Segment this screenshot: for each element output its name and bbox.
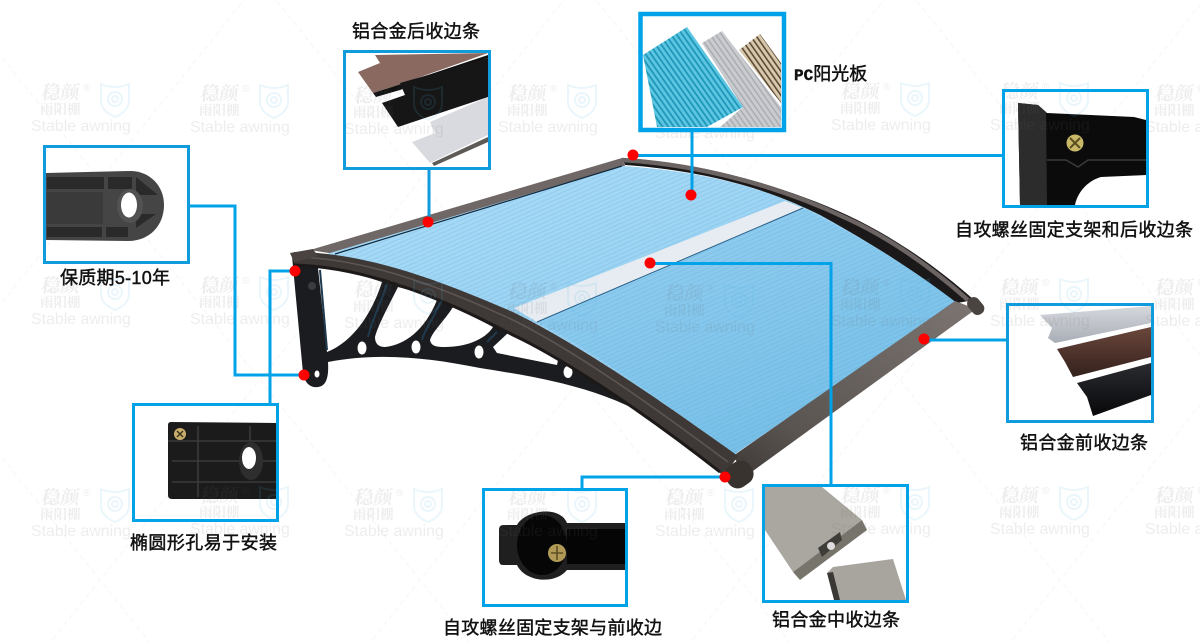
dot: oval hole (290, 266, 300, 276)
connector: PC sheet (690, 132, 694, 195)
panel: front trim strips photo (1040, 306, 1151, 416)
watermarks: 雨阳棚 (999, 293, 1040, 313)
connector: front trim (924, 338, 1006, 342)
watermarks: Stable awning (190, 521, 290, 538)
watermarks: 雨阳棚 (1154, 293, 1195, 313)
watermarks: 稳颜 (999, 77, 1042, 104)
watermarks: Stable awning (344, 121, 444, 138)
watermarks: 雨阳棚 (507, 99, 548, 119)
frame: front fixing (484, 490, 626, 606)
watermarks: 雨阳棚 (353, 295, 394, 315)
watermarks: 稳颜 (1154, 273, 1197, 300)
watermarks: Stable awning (31, 523, 131, 540)
frame: bracket end (44, 146, 188, 262)
watermarks: 稳颜 (999, 481, 1042, 508)
label: front fixing: 自攻螺丝固定支架与前收边 (443, 618, 662, 638)
watermarks: 稳颜 (664, 279, 707, 306)
watermarks: 稳颜 (840, 77, 883, 104)
watermarks: 雨阳棚 (507, 297, 548, 317)
panel front tint (537, 208, 957, 454)
dot: front fixing (720, 472, 730, 482)
watermarks: 稳颜 (353, 81, 396, 108)
watermarks: Stable awning (655, 125, 755, 142)
frame: PC sheet (640, 14, 784, 130)
dot: bracket end (298, 370, 310, 380)
panel: rear trim strips photo (358, 53, 488, 166)
watermarks: Stable awning (831, 521, 931, 538)
watermarks: 稳颜 (40, 483, 83, 510)
watermarks: 稳颜 (353, 483, 396, 510)
watermarks: 稳颜 (507, 277, 550, 304)
dot: PC sheet (686, 190, 696, 200)
watermarks: Stable awning (655, 319, 755, 336)
watermarks: Stable awning (498, 119, 598, 136)
watermarks: Stable awning (190, 119, 290, 136)
watermarks: ® (1042, 82, 1050, 93)
right end cap (965, 295, 987, 318)
panel: PC sheet photo (643, 27, 781, 127)
connector: bracket end (190, 206, 304, 375)
watermarks: Stable awning (831, 313, 931, 330)
frame: rear trim (344, 52, 490, 168)
watermarks: 稳颜 (840, 273, 883, 300)
connector: front fixing (582, 477, 725, 488)
bracket cap (290, 249, 318, 262)
front rail (733, 301, 976, 476)
watermarks: ® (550, 84, 558, 95)
panel: rear fixing photo (1018, 103, 1146, 205)
label: rear trim: 铝合金后收边条 (352, 22, 480, 42)
watermarks: 稳颜 (199, 79, 242, 106)
watermarks: Stable awning (190, 311, 290, 328)
watermarks: ® (396, 280, 404, 291)
watermarks: 雨阳棚 (507, 503, 548, 523)
frame: rear fixing (1004, 90, 1148, 206)
dot: front trim (918, 334, 930, 344)
watermarks: 雨阳棚 (40, 98, 81, 118)
watermarks: Stable awning (498, 317, 598, 334)
watermarks: ® (242, 84, 250, 95)
left rail under shade (294, 265, 720, 472)
watermarks: ® (550, 282, 558, 293)
PC panel rear (320, 166, 957, 454)
watermarks: 雨阳棚 (840, 97, 881, 117)
watermarks: 雨阳棚 (1154, 501, 1195, 521)
watermarks: 雨阳棚 (840, 293, 881, 313)
watermarks: 雨阳棚 (999, 501, 1040, 521)
watermarks: 稳颜 (664, 483, 707, 510)
watermarks: 雨阳棚 (1154, 99, 1195, 119)
label: oval hole: 椭圆形孔易于安装 (130, 533, 277, 553)
watermarks: 雨阳棚 (353, 503, 394, 523)
watermarks: Stable awning (31, 118, 131, 135)
watermarks: Stable awning (31, 311, 131, 328)
watermarks: 稳颜 (507, 79, 550, 106)
watermarks: 雨阳棚 (199, 99, 240, 119)
panel: bracket end photo (46, 171, 164, 241)
label: PC sheet: PC阳光板 (794, 64, 867, 85)
watermarks: 稳颜 (40, 271, 83, 298)
watermarks: Stable awning (831, 117, 931, 134)
label: front trim: 铝合金前收边条 (1020, 433, 1148, 453)
watermarks: 雨阳棚 (999, 97, 1040, 117)
watermarks: 稳颜 (199, 271, 242, 298)
middle strip (514, 201, 803, 322)
watermarks: 稳颜 (40, 78, 83, 105)
watermarks: ® (883, 278, 891, 289)
awning product (290, 158, 987, 493)
watermarks: 雨阳棚 (664, 299, 705, 319)
panel: middle trim photo (765, 487, 906, 600)
label: rear fixing: 自攻螺丝固定支架和后收边条 (955, 220, 1193, 240)
watermarks: 稳颜 (353, 275, 396, 302)
watermarks: ® (396, 488, 404, 499)
watermarks: ® (242, 486, 250, 497)
watermarks: 雨阳棚 (199, 501, 240, 521)
watermarks: ® (550, 488, 558, 499)
label: middle trim: 铝合金中收边条 (772, 610, 900, 630)
watermarks: ® (83, 83, 91, 94)
watermarks: ® (883, 82, 891, 93)
frame: front trim (1008, 304, 1152, 422)
watermarks: ® (707, 284, 715, 295)
watermarks: ® (83, 276, 91, 287)
connector: oval hole (270, 271, 295, 403)
ribs overlay (320, 166, 957, 454)
connector: middle trim (650, 264, 831, 484)
right rail top band (622, 160, 968, 300)
watermarks: 雨阳棚 (40, 503, 81, 523)
panel: front fixing photo (499, 511, 625, 580)
watermarks: Stable awning (990, 117, 1090, 134)
watermarks (31, 77, 1200, 540)
watermarks: 雨阳棚 (40, 291, 81, 311)
watermarks: Stable awning (990, 521, 1090, 538)
left arc rail (294, 252, 738, 476)
watermarks: ® (707, 488, 715, 499)
watermarks: Stable awning (344, 523, 444, 540)
connector: rear fixing (633, 154, 1003, 157)
dot: rear trim (422, 216, 434, 228)
panel: oval hole photo (168, 422, 277, 499)
bracket (292, 256, 660, 412)
watermarks: 稳颜 (1154, 481, 1197, 508)
watermarks: 雨阳棚 (199, 291, 240, 311)
back rail (310, 158, 625, 254)
watermarks: Stable awning (498, 523, 598, 540)
watermarks: Stable awning (655, 523, 755, 540)
watermarks: 稳颜 (1154, 79, 1197, 106)
watermarks: 雨阳棚 (840, 501, 881, 521)
watermarks: Stable awning (344, 315, 444, 332)
frame: middle trim (764, 486, 908, 602)
watermarks: ® (1042, 486, 1050, 497)
watermarks: ® (83, 488, 91, 499)
watermarks: 雨阳棚 (353, 101, 394, 121)
watermarks: ® (1042, 278, 1050, 289)
watermarks: ® (396, 86, 404, 97)
watermarks: Stable awning (990, 313, 1090, 330)
watermarks: 稳颜 (999, 273, 1042, 300)
watermarks: ® (242, 276, 250, 287)
watermarks: 雨阳棚 (664, 503, 705, 523)
watermarks: 稳颜 (199, 481, 242, 508)
rear rail inner line (335, 166, 622, 254)
watermarks: 稳颜 (840, 481, 883, 508)
label: warranty: 保质期5-10年 (60, 268, 170, 288)
front end cap (721, 456, 758, 493)
watermarks: ® (883, 486, 891, 497)
dot: middle trim (644, 258, 656, 268)
connector: rear trim (428, 169, 430, 222)
right arc rail (622, 158, 974, 303)
watermarks: 稳颜 (507, 483, 550, 510)
left rail highlight (294, 257, 728, 462)
frame: oval hole (134, 404, 278, 520)
dot: rear fixing (628, 150, 638, 160)
strip shadow line (537, 208, 803, 322)
